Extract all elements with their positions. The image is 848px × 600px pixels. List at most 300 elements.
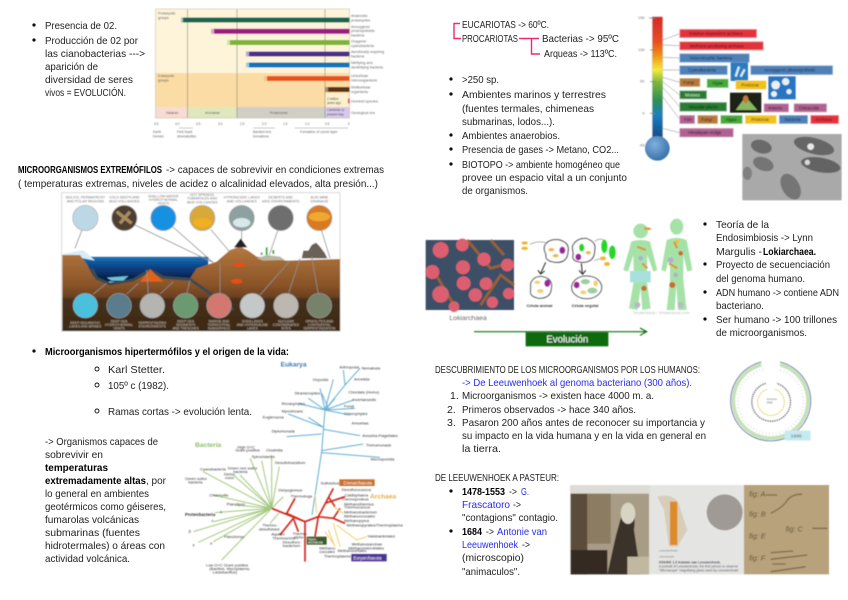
chart: geological timeline of life groups: Hadean [166,111,178,115]
figure: hand drawings of animalcules: fig: C [786,525,803,534]
chart: thermometer of life temperature limits: Vascular plants [688,104,718,109]
diagram: phylogenetic tree of life: Planctipes [227,502,245,507]
text block: discovery of microorganisms [435,364,706,455]
chart: geological timeline of life groups: Banded iron [253,130,271,134]
diagram: phylogenetic tree of life: Methanobacterium [344,509,378,514]
diagram: phylogenetic tree of life: Methanocellales [338,548,366,553]
diagram: extremophile habitats on Earth: DRAINAGE [310,199,329,203]
chart: geological timeline of life groups: Nitrifying and [351,61,373,65]
chart: geological timeline of life groups: cyanobacteria [351,44,375,48]
diagram: phylogenetic tree of life: Rhodophytes [282,401,305,406]
text block: Leeuwenhoek to Pasteur: DE LEEUWENHOEK A PASTEUR: [435,472,559,484]
diagram: phylogenetic tree of life: Thermo- [293,531,308,536]
diagram: extremophile habitats on Earth: NUCLEAR [278,320,295,324]
text block: habitat bullets: >250 sp. [462,74,499,86]
diagram: extremophile habitats on Earth: SUBSURFACE [208,326,231,330]
text block: Leeuwenhoek to Pasteur: -> [522,539,530,551]
chart: thermometer of life temperature limits: 100 [638,47,645,52]
chart: geological timeline of life groups: 2.0 [262,122,267,126]
text block: endosymbiosis and human genome bullets: Lokiarchaea. [763,246,816,258]
diagram: phylogenetic tree of life: Planctomyc [224,534,245,539]
text block: hyperthermophile definition: extremadamente altas [45,475,146,487]
diagram: phylogenetic tree of life: Annelida [354,376,370,381]
section: extremes of temperature notes: PROCARIOTAS [462,33,518,45]
text block: endosymbiosis and human genome bullets: Margulis - [716,246,762,258]
chart: geological timeline of life groups: Cambrian to [327,108,345,112]
diagram: phylogenetic tree of life: Desulfurococcus [342,487,371,492]
text block: Leeuwenhoek to Pasteur: "contagions" contagio. [462,512,558,524]
diagram: phylogenetic tree of life: Nematoda [362,365,381,370]
diagram: phylogenetic tree of life: Microsporidia [371,457,395,462]
diagram: extremophile habitats on Earth: VENTS [113,326,125,330]
Bacteria branches [193,455,283,560]
chart: thermometer of life temperature limits: Himalayan midge [688,130,722,135]
diagram: phylogenetic tree of life: Methano- [319,545,337,550]
chart: thermometer of life temperature limits: 50 [640,79,645,84]
domain labels: Eukarya [281,362,307,369]
chart: geological timeline of life groups: prokaryotes [351,18,370,22]
heading: extremophile microorganisms [18,163,384,190]
text block: Leeuwenhoek to Pasteur: -> [509,486,517,498]
chart: thermometer of life temperature limits: Protozoa [741,82,759,87]
figure: hand drawings of animalcules: fig: F [749,554,766,563]
section: extremes of temperature notes: EUCARIOTAS -> 60ºC. [462,19,549,31]
diagram: phylogenetic tree of life: Chordata (Homo) [348,390,380,395]
chart: thermometer of life temperature limits [638,15,842,203]
chart: thermometer of life temperature limits: Sulphur-dependent archaea [689,31,743,36]
text block: Leeuwenhoek to Pasteur [435,472,559,578]
text block: Leeuwenhoek to Pasteur: 1684 [462,526,482,538]
text block: hyperthermophile definition: geotérmicos como géiseres, [45,501,166,513]
chart: thermometer of life temperature limits: Fungi [683,80,694,85]
text block: Leeuwenhoek to Pasteur: -> [513,499,521,511]
text block: Leeuwenhoek to Pasteur: -> [486,526,494,538]
diagram: phylogenetic tree of life: Methanomicrobiales [348,545,384,550]
figure: hand drawings of animalcules: fig: A [749,490,766,499]
diagram: extremophile habitats on Earth: SEDIMENTS [176,323,196,327]
text block: hyperthermophile definition: , por [146,475,166,487]
text block: hyperthermophile definition: sobrevivir en [45,449,103,461]
diagram: extremophile habitats on Earth: SERPENTINIZATION [303,326,336,330]
chart: thermometer of life temperature limits: Anoxygenic photosynthetic [764,68,816,73]
chart: geological timeline of life groups: years ago [327,101,341,105]
chart: geological timeline of life groups: 2.5 [240,122,245,126]
diagram: extremophile habitats on Earth: MARINE AND [209,320,230,324]
chart: thermometer of life temperature limits: Fungi [701,117,712,122]
diagram: extremophile habitats on Earth: MUD VOLCANOES [109,199,140,203]
diagram: phylogenetic tree of life: Incertaesedis [352,397,376,402]
chart: geological timeline of life groups: denitrifying bacteria [351,66,384,70]
diagram: animal and plant cell endosymbiosis [521,238,616,308]
text block: Leeuwenhoek to Pasteur: 1478-1553 [462,486,505,498]
chart: geological timeline of life groups: 0.5 [325,122,330,126]
chart: geological timeline of life groups: stromatolites [177,134,197,138]
organism labels [680,29,757,38]
diagram: phylogenetic tree of life: Thermoplasma [324,554,351,559]
chart: thermometer of life temperature limits: Ostracoda [799,105,820,110]
diagram: phylogenetic tree of life: coccales [319,549,335,554]
section: oxygen and evolution notes: Producción de 02 por [45,35,138,47]
diagram: extremophile habitats on Earth: HYDROTHERMAL [105,323,133,327]
diagram: animal and plant cell endosymbiosis: Célula vegetal [572,303,598,308]
diagram: phylogenetic tree of life: Bacteria [195,442,222,449]
chart: thermometer of life temperature limits: Algae [712,81,724,86]
chart: geological timeline of life groups: Hominid species [351,100,378,104]
diagram: phylogenetic tree of life: Dictyoglomus [278,488,302,493]
section: oxygen and evolution notes [32,20,145,99]
figure: hand drawings of animalcules [744,485,829,574]
text block: endosymbiosis and human genome bullets: Ser humano -> 100 trillones [716,314,837,326]
diagram: phylogenetic tree of life: Chlamydia [209,492,229,497]
chart: thermometer of life temperature limits: -50 [639,143,646,148]
diagram: phylogenetic tree of life: Methanoccocales [344,514,375,519]
figure: microscope anatomy [650,485,744,574]
diagram: phylogenetic tree of life: Euglenozoa [263,415,284,420]
label box: Evolución: Evolución [546,335,588,346]
label box: Evolución [526,332,608,346]
diagram: extremophile habitats on Earth: HYPERACIDIC LAKES [224,195,260,199]
chart: geological timeline of life groups: Unicellular [351,74,369,78]
diagram: phylogenetic tree of life: Green sulfur [185,476,208,481]
diagram: extremophile habitats on Earth: HOT SPRINGS, [190,193,215,197]
diagram: extremophile habitats on Earth: TERRESTRIAL [208,323,231,327]
text block: endosymbiosis and human genome bullets: bacteriano. [716,300,764,312]
diagram: phylogenetic tree of life: Myxotricans [282,409,303,414]
illustration: human microbiome figures: Shutterstock / Shutterstock.com [633,310,690,315]
ocean [82,257,208,282]
diagram: phylogenetic tree of life: Low G+C Gram positive [206,563,249,568]
diagram: phylogenetic tree of life: Gram positive [235,448,261,453]
arrow: evolution direction [474,328,647,335]
diagram: phylogenetic tree of life: Methanopyrales/Thermoplasma [347,523,403,528]
diagram: extremophile habitats on Earth: SITES [281,326,292,330]
chart: geological timeline of life groups: bacteria [351,34,365,38]
connector lines [75,225,330,295]
diagram: phylogenetic tree of life: Caldisphaera [345,493,369,498]
chart: geological timeline of life groups: 4.5 [154,122,159,126]
section: Lokiarchaea, endosymbiosis and human microbiome evolution [425,219,692,346]
chart: geological timeline of life groups: 4.0 [175,122,180,126]
diagram: phylogenetic tree of life: Trichomonads [366,443,391,448]
diagram: phylogenetic tree of life: Spirochaetes [252,454,275,459]
text block: habitat bullets [449,74,627,197]
chart: thermometer of life temperature limits: 150 [638,15,645,20]
diagram: phylogenetic tree of life: bacteria [233,469,248,474]
heading: extremophile microorganisms: -> capaces de sobrevivir en condiciones extremas [166,164,384,176]
text block: endosymbiosis and human genome bullets: Endosimbiosis -> Lynn [716,232,813,244]
Eukarya branches [287,368,380,515]
chart: geological timeline of life groups: present day [327,112,344,116]
chart: geological timeline of life groups: Aerobically respiring [351,50,384,54]
diagram: phylogenetic tree of life: γ [193,542,195,547]
diagram: phylogenetic tree of life: Fungi [344,403,354,408]
chart: geological timeline of life groups: Anoxygenic [351,25,370,29]
heading: extremophile microorganisms: MICROORGANISMOS EXTREMÓFILOS [18,163,162,176]
figure: microscope anatomy: FIGURE 1.5 Antonie van Leeuwenhoek. [659,560,721,564]
figure: microscope anatomy: Leeuwenhoek [659,549,678,553]
text block: endosymbiosis and human genome bullets: Teoría de la [716,219,769,231]
diagram: phylogenetic tree of life: Sulfolobus [321,480,339,485]
diagram: phylogenetic tree of life: Aquifex [271,531,285,536]
chart: thermometer of life temperature limits: Mosses [685,92,700,97]
chart: thermometer of life temperature limits: Heterotrophic bacteria [690,55,733,60]
text block: habitat bullets: Ambientes marinos y terrestres [462,89,606,101]
diagram: extremophile habitats on Earth: CONTAMINATED [273,323,300,327]
section: extremes of temperature notes: Bacterias -> 95ºC [542,33,619,45]
section: hyperthermophile heading and list [32,346,289,418]
chart: geological timeline of life groups: bacteria [351,54,365,58]
diagram: extremophile habitats on Earth: SHALLOW-WATER [148,194,179,198]
text block: hyperthermophile definition: temperaturas [45,462,108,474]
text block: discovery of microorganisms: 2. [447,404,456,416]
chart: geological timeline of life groups: 3.5 [196,122,201,126]
terrain [62,247,340,331]
diagram: circular bacterial genome 1995: 1995 [767,400,773,404]
diagram: extremophile habitats on Earth: LAKES AND BRINES [69,325,102,329]
diagram: phylogenetic tree of life: Lactobacillus) [213,569,238,574]
bottom habitat circles [73,293,98,318]
section: hyperthermophile heading and list: 105º c (1982). [108,380,169,392]
diagram: extremophile habitats on Earth: DEEP-SEA [177,320,195,324]
figure: hand drawings of animalcules: fig: E [749,531,766,540]
chart: geological timeline of life groups: Archaean [205,111,220,115]
diagram: phylogenetic tree of life: Deino- [224,472,236,477]
text block: hyperthermophile definition: lo general en ambientes [45,488,149,500]
diagram: extremophile habitats on Earth: DEEP-SEA [111,320,128,324]
section: oxygen and evolution notes: Presencia de 02. [45,20,117,32]
diagram: phylogenetic tree of life: Methanosarcinae [352,541,383,546]
diagram: phylogenetic tree of life: Stramenopiles [295,390,320,395]
chart: geological timeline of life groups: Proterozoic [270,111,288,115]
image panel: Leeuwenhoek photo, microscope and drawings [570,485,829,574]
diagram: phylogenetic tree of life: Nano- [308,537,317,541]
diagram: phylogenetic tree of life: Amoebas [352,421,369,426]
text block: Leeuwenhoek to Pasteur: (microscopio) [462,552,524,564]
chart: geological timeline of life groups: Earth [153,130,161,134]
illustration: human microbiome figures [623,219,692,315]
text block: habitat bullets: submarinas, lodos...). [462,116,555,128]
figure: microscope anatomy: A portrait of Leeuwenhoek, the first person to observe [659,564,738,568]
chart: geological timeline of life groups: groups [158,16,169,20]
text block: Leeuwenhoek to Pasteur: Antonie van [497,526,547,538]
Thermophile red branches [272,488,345,562]
diagram: phylogenetic tree of life: Cyanobacteria [200,467,226,472]
text block: discovery of microorganisms: Primeros observados -> hace 340 años. [462,404,636,416]
text block: endosymbiosis and human genome bullets: de microorganismos. [716,327,807,339]
diagram: phylogenetic tree of life: Archaea [370,494,397,501]
chart: geological timeline of life groups: First fossil [177,130,193,134]
diagram: phylogenetic tree of life: Crenarchaeota [343,480,373,485]
diagram: circular bacterial genome 1995: Genome [767,397,777,401]
chart: geological timeline of life groups: microorganisms [351,78,377,82]
diagram: extremophile habitats on Earth: CONTINENTAL [308,323,331,327]
text block: discovery of microorganisms: Pasaron 200 años antes de reconocer su importancia y [462,417,706,429]
top habitat circles [73,205,98,231]
chart: thermometer of life temperature limits: Fish [684,117,693,122]
diagram: phylogenetic tree of life: High G+C [237,444,255,449]
chart: geological timeline of life groups: 1.5 [283,122,288,126]
diagram: phylogenetic tree of life: Chlorophytes [344,411,367,416]
chart: geological timeline of life groups: formations [253,134,269,138]
photo: Lokiarchaea cells [425,239,514,312]
text block: habitat bullets: (fuentes termales, chimeneas [462,103,594,115]
section: hyperthermophile heading and list: Ramas cortas -> evolución lenta. [108,406,252,418]
caption: Lokiarchaea: Lokiarchaea [449,316,487,322]
micrograph of cells [742,134,842,200]
chart: geological timeline of life groups [153,9,384,138]
diagram: phylogenetic tree of life: α [210,541,213,546]
diagram: phylogenetic tree of life: Thermocrinis [272,535,295,540]
diagram: phylogenetic tree of life: β [189,529,192,534]
chart: geological timeline of life groups: Prokaryotic [158,12,176,16]
text block: Leeuwenhoek to Pasteur: G. [521,486,529,498]
diagram: phylogenetic tree of life: desulfobact. [259,526,280,531]
diagram: phylogenetic tree of life: Thermotoga [291,493,313,498]
text block: Leeuwenhoek to Pasteur: "animaculos". [462,566,520,578]
chart: thermometer of life temperature limits: Methane-producing archaea [690,43,744,48]
chart: geological timeline of life groups: Geological era [351,111,376,115]
diagram: phylogenetic tree of life: Proteobacteria [185,512,216,517]
diagram: phylogenetic tree of life: ε [212,518,214,523]
chart: thermometer of life temperature limits: 0 [642,110,645,115]
chart: geological timeline of life groups: Formation of ozone layer [300,130,338,134]
diagram: phylogenetic tree of life: δ [220,509,223,514]
diagram: phylogenetic tree of life: Clostridia [266,448,283,453]
diagram: circular bacterial genome 1995 [731,362,811,441]
heading: extremophile microorganisms: ( temperaturas extremas, niveles de acidez o alcalinidad elevados, alta presión...) [18,178,378,190]
chart: geological timeline of life groups: Oxygenic [351,40,367,44]
text block: discovery of microorganisms: DESCUBRIMIENTO DE LOS MICROORGANISMOS POR LOS HUMANOS: [435,364,700,376]
diagram: extremophile habitats on Earth: SERPENTINIZING [138,321,167,325]
chart: thermometer of life temperature limits: Cyanobacteria [688,68,716,73]
chart: thermometer of life temperature limits: Algae [726,117,737,122]
diagram: extremophile habitats on Earth: ACID MINE [310,195,329,199]
diagram: extremophile habitats on Earth: DEEP-SEA ANOXIC [70,321,101,325]
diagram: extremophile habitats on Earth: ARID ENVIRONMENTS [262,199,300,203]
section: oxygen and evolution notes: vivos = EVOLUCIÓN. [45,86,126,99]
text block: habitat bullets: BIOTOPO -> ambiente homogéneo que [462,159,620,171]
diagram: phylogenetic tree of life: Green non sulfur [228,465,258,470]
section: oxygen and evolution notes: diversidad de seres [45,74,133,86]
diagram: phylogenetic tree of life: Thermo- [262,523,278,528]
diagram: phylogenetic tree of life: Thermoproteus [342,497,369,502]
diagram: circular bacterial genome 1995: 1995 [791,434,802,440]
chart: geological timeline of life groups: 0 [348,122,350,126]
diagram: extremophile habitats on Earth: DESERTS AND [268,195,293,199]
Archaea yellow branches [315,495,367,547]
diagram: extremophile habitats on Earth: AND VOLCANOES [227,199,257,203]
text block: habitat bullets: Ambientes anaerobios. [462,130,560,142]
diagram: phylogenetic tree of life: Desulfofuscidium [275,460,306,465]
text block: endosymbiosis and human genome bullets: Proyecto de secuenciación [716,259,830,271]
section: oxygen and evolution notes: las cianobacterias ---> [45,48,145,60]
text block: hyperthermophile definition [45,436,166,565]
diagram: extremophile habitats on Earth: AND TRENCHES [173,326,200,330]
diagram: extremophile habitats on Earth: FUMAROLES AND [187,197,218,201]
diagram: extremophile habitats on Earth: MUD VOLCANOES [187,200,218,204]
text block: hyperthermophile definition: actividad volcánica. [45,553,130,565]
text block: hyperthermophile definition: submarinas (fuentes [45,527,140,539]
text block: endosymbiosis and human genome bullets: del genoma humano. [716,273,805,285]
diagram: extremophile habitats on Earth: AND HYPERSALINE [237,323,269,327]
taxa labels: Arthropoda [339,364,360,369]
chart: geological timeline of life groups: 3.0 [218,122,223,126]
chart: geological timeline of life groups: groups [158,78,169,82]
chart: geological timeline of life groups: Eukaryotic [158,74,175,78]
diagram: phylogenetic tree of life: Euryarchaeota [353,555,382,560]
diagram: phylogenetic tree of life: archaeota [308,541,323,545]
text block: discovery of microorganisms: su impacto en la vida humana y en la vida en general en [462,430,706,442]
diagram: phylogenetic tree of life: Desulfuro- [283,539,302,544]
chart: thermometer of life temperature limits: Protozoa [751,117,769,122]
photo: Leeuwenhoek at the microscope [570,485,650,574]
diagram: extremophile habitats on Earth: VENTS [158,202,170,206]
section: extremes of temperature notes: Arqueas -> 113ºC. [544,48,617,60]
diagram: phylogenetic tree of life: Amoeba-Flagellates [362,433,398,438]
section: hyperthermophile heading and list: Karl Stetter. [108,364,165,376]
chart: geological timeline of life groups: formed [153,134,164,138]
text block: habitat bullets: de organismos. [462,185,528,197]
section: oxygen and evolution notes: aparición de [45,61,98,73]
text block: discovery of microorganisms: -> De Leeuwenhoek al genoma bacteriano (300 años). [462,377,692,389]
section: extremes of temperature notes [454,19,619,60]
diagram: phylogenetic tree of life: Oxyurids [313,377,328,382]
diagram: phylogenetic tree of life: Thermococcus [344,505,370,510]
chart: geological timeline of life groups: Anaerobic [351,14,368,18]
text block: discovery of microorganisms: 3. [447,417,456,429]
text block: habitat bullets: provee un espacio vital a un conjunto [462,172,627,184]
text block: hyperthermophile definition: -> Organismos capaces de [45,436,158,448]
figure: hand drawings of animalcules: fig: B [749,510,766,519]
diagram: phylogenetic tree of life: Methanothermus [344,501,374,506]
chart: geological timeline of life groups: organisms [351,90,368,94]
diagram: phylogenetic tree of life: bacteria [188,479,203,484]
text block: discovery of microorganisms: 1. [450,390,459,402]
text block: discovery of microorganisms: Microorganismos -> existen hace 4000 m. a. [462,390,654,402]
diagram: extremophile habitats on Earth: ENVIRONMENTS [139,325,167,329]
diagram: extremophile habitats on Earth: SODA LAKES [242,320,264,324]
chart: geological timeline of life groups: 2 million [327,97,339,101]
chart: geological timeline of life groups: Multicellular [351,86,371,90]
figure: microscope anatomy: "Microscope" magnifying glass used by Leeuwenhoek [659,568,739,572]
text block: Leeuwenhoek to Pasteur: Frascatoro [462,499,510,511]
diagram: extremophile habitats on Earth: LAKES [247,326,258,330]
chart: geological timeline of life groups: 1.0 [305,122,310,126]
diagram: phylogenetic tree of life: Halobacteriales [368,534,395,539]
text block: habitat bullets: Presencia de gases -> Metano, CO2... [462,144,619,156]
diagram: phylogenetic tree of life: (Bacillus, Mycoplasma, [209,566,250,571]
chart: geological timeline of life groups: photosynthetic [351,29,375,33]
chart: thermometer of life temperature limits: Archaea [816,117,832,122]
text block: hyperthermophile definition: hidrotermales) o áreas con [45,540,165,552]
text block: endosymbiosis and human genome bullets [703,219,839,339]
diagram: extremophile habitats on Earth: OPHIOLITES AND [305,320,334,324]
chart: thermometer of life temperature limits: Insects [768,105,782,110]
diagram: phylogenetic tree of life: bacterium [283,543,301,548]
text block: discovery of microorganisms: la tierra. [462,443,501,455]
diagram: phylogenetic tree of life: Methanopyrus [344,518,369,523]
chart: thermometer of life temperature limits: Bacteria [785,117,801,122]
diagram: extremophile habitats on Earth: AND POLAR REGIONS [67,199,105,203]
diagram: phylogenetic tree of life [185,362,403,574]
figure: microscope anatomy: microscope [659,554,675,558]
diagram: phylogenetic tree of life: sipho [294,535,304,540]
habitat labels: SEA ICE, PERMAFROST [65,195,106,199]
text block: Leeuwenhoek to Pasteur: Leeuwenhoek [462,539,519,551]
diagram: extremophile habitats on Earth: HYDROTHERMAL [149,198,178,202]
diagram: phylogenetic tree of life: Diplomonads [272,429,295,434]
diagram: animal and plant cell endosymbiosis: Célula animal [527,303,552,308]
